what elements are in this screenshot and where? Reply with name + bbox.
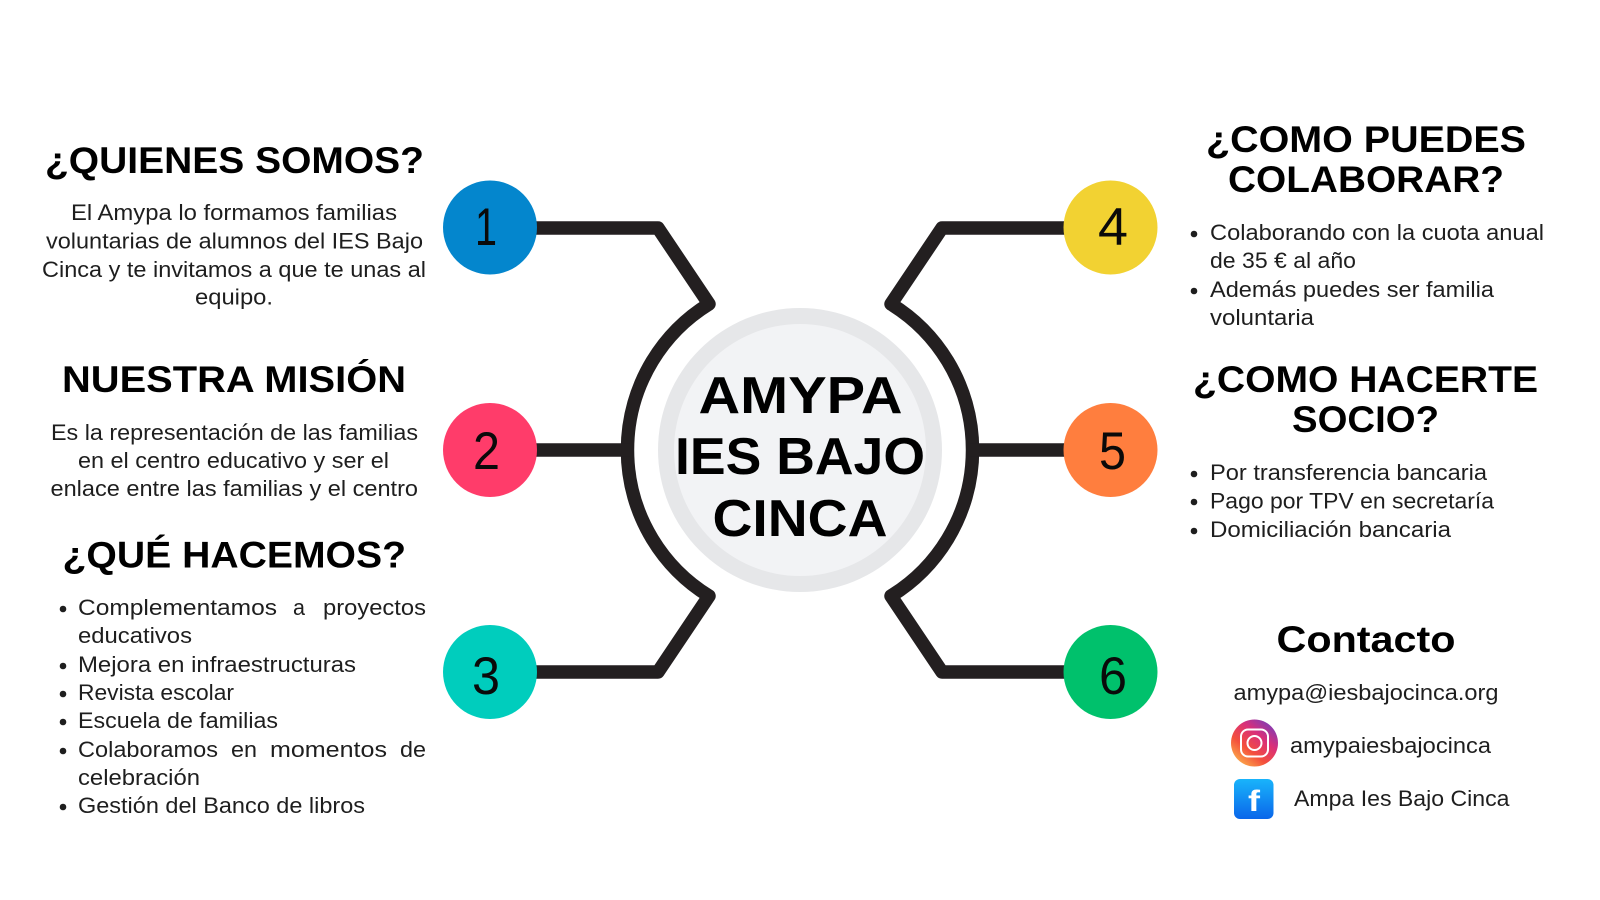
heading: quienes somos: ¿QUIENES SOMOS? <box>45 140 424 181</box>
panel: quienes somos <box>42 140 426 310</box>
bullet list: que hacemos: proyectos <box>323 595 426 620</box>
heading: como hacerte socio <box>1193 359 1538 440</box>
heading: nuestra mision: NUESTRA MISIÓN <box>62 358 406 400</box>
heading: como puedes colaborar <box>1206 119 1526 200</box>
number circle 4 <box>1064 180 1158 274</box>
text block: nuestra mision: Es la representación de las familias <box>51 420 418 445</box>
bullet list: como puedes colaborar: Colaborando con la cuota anual <box>1210 220 1544 245</box>
bullet list: como puedes colaborar: voluntaria <box>1210 305 1315 330</box>
number circle 3 <box>443 625 537 719</box>
icon: facebook <box>1234 779 1274 819</box>
facebook page name: Ampa Ies Bajo Cinca <box>1294 786 1510 811</box>
number circle 4: 4 <box>1098 198 1128 257</box>
text block: quienes somos: El Amypa lo formamos familias <box>71 200 397 225</box>
text block: quienes somos: Cinca y te invitamos a que te unas al <box>42 257 426 282</box>
central circle with title: IES BAJO <box>675 428 925 486</box>
number circle 5: 5 <box>1099 422 1126 481</box>
number circle 6: 6 <box>1099 647 1127 706</box>
bullet list: como hacerte socio: Domiciliación bancaria <box>1210 517 1452 542</box>
heading: que hacemos: ¿QUÉ HACEMOS? <box>62 534 406 576</box>
bullet list: que hacemos: a <box>293 595 306 620</box>
bullet list: que hacemos: Mejora en infraestructuras <box>78 652 356 677</box>
number circle 2 <box>443 403 537 497</box>
central circle with title: CINCA <box>712 490 888 548</box>
instagram handle: amypaiesbajocinca <box>1290 733 1492 758</box>
icon: instagram <box>1231 720 1278 766</box>
bullet list: como puedes colaborar <box>1191 220 1544 330</box>
bullet list: que hacemos: celebración <box>78 765 200 790</box>
bullet list: como hacerte socio: Por transferencia bancaria <box>1210 460 1488 485</box>
heading: como puedes colaborar: COLABORAR? <box>1228 159 1504 200</box>
email address: amypa@iesbajocinca.org <box>1234 680 1498 705</box>
bullet list: que hacemos: de <box>400 737 426 762</box>
text block: quienes somos: voluntarias de alumnos del IES Bajo <box>46 228 423 254</box>
number circle 6 <box>1064 625 1158 719</box>
number circle 5 <box>1064 403 1158 497</box>
bullet list: como hacerte socio: Pago por TPV en secretaría <box>1210 488 1495 514</box>
text block: nuestra mision: en el centro educativo y ser el <box>78 448 389 473</box>
heading: como hacerte socio: ¿COMO HACERTE <box>1193 359 1538 400</box>
bullet list: que hacemos: Revista escolar <box>78 680 234 705</box>
bullet list: como puedes colaborar: de 35 € al año <box>1210 248 1356 273</box>
panel: nuestra mision <box>50 358 418 501</box>
bullet list: que hacemos: en <box>231 737 257 762</box>
number circle 1 <box>443 180 537 274</box>
number circle 3: 3 <box>472 647 500 706</box>
panel: que hacemos <box>60 534 426 818</box>
bullet list: como hacerte socio <box>1191 460 1495 542</box>
heading: contacto: Contacto <box>1276 619 1456 660</box>
hub connector lines <box>530 228 1070 672</box>
bullet list: que hacemos: Complementamos <box>78 595 277 620</box>
bullet list: que hacemos: Escuela de familias <box>78 708 278 733</box>
bullet list: que hacemos: Gestión del Banco de libros <box>78 793 365 818</box>
bullet list: que hacemos: Colaboramos <box>78 737 218 762</box>
text block: nuestra mision: enlace entre las familias y el centro <box>50 476 418 501</box>
panel: como hacerte socio <box>1191 359 1538 542</box>
bullet list: que hacemos: educativos <box>78 623 192 648</box>
panel: contacto <box>1231 619 1510 819</box>
heading: como hacerte socio: SOCIO? <box>1292 399 1439 440</box>
bullet list: que hacemos <box>60 595 426 818</box>
text block: quienes somos <box>42 200 426 310</box>
icon: facebook: f <box>1248 785 1261 818</box>
bullet list: como puedes colaborar: Además puedes ser familia <box>1210 277 1495 302</box>
central circle with title: AMYPA <box>698 367 902 425</box>
number circle 2: 2 <box>473 422 500 481</box>
bullet list: que hacemos: momentos <box>270 737 387 762</box>
number circle 1: 1 <box>475 198 497 257</box>
heading: como puedes colaborar: ¿COMO PUEDES <box>1206 119 1526 160</box>
text block: quienes somos: equipo. <box>195 284 273 310</box>
panel: como puedes colaborar <box>1191 119 1544 330</box>
central circle with title <box>658 308 942 592</box>
text block: nuestra mision <box>50 420 418 501</box>
